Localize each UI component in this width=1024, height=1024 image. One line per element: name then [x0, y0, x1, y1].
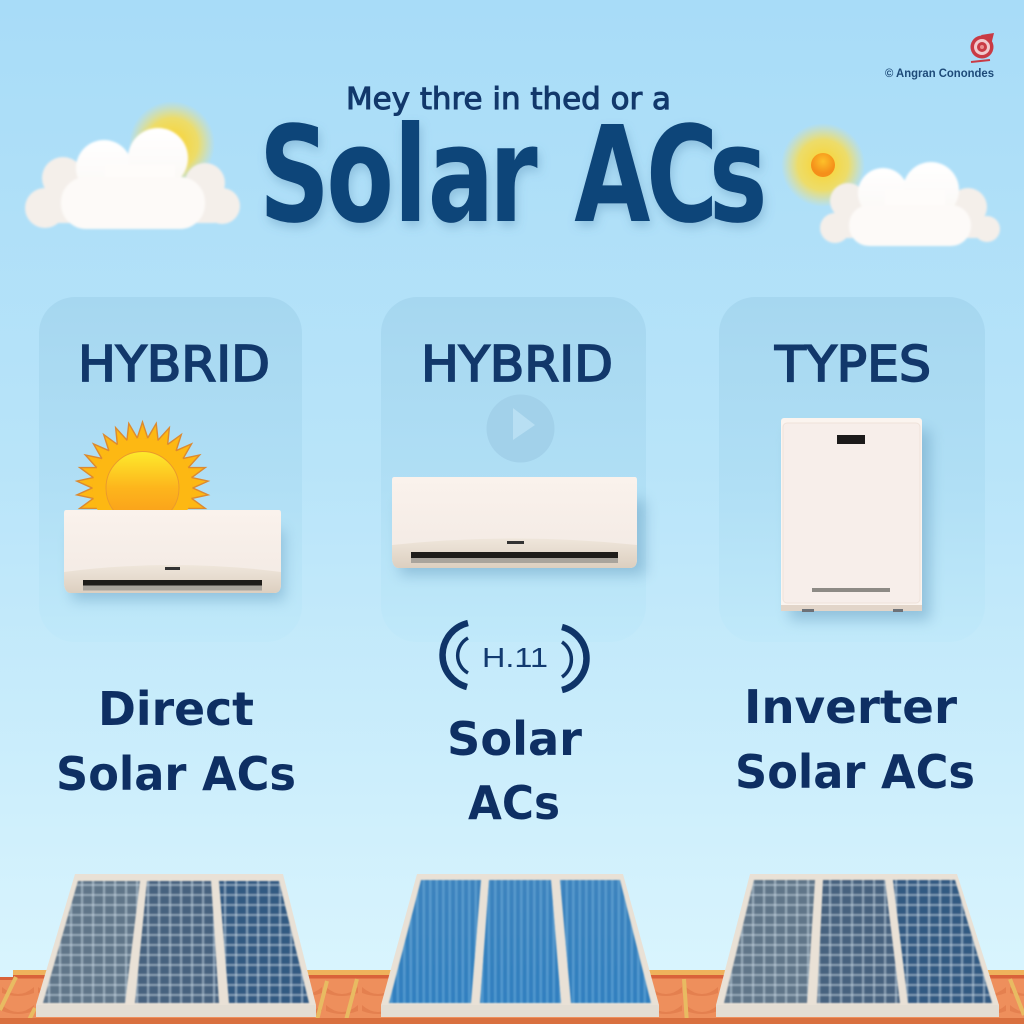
panel: hybrid middle [381, 297, 646, 642]
label: direct solar acs: Solar ACs [56, 747, 296, 801]
icon: right sun and cloud [781, 123, 1000, 246]
label: inverter solar acs: Inverter [744, 680, 957, 734]
solar panel 1 [36, 874, 316, 1017]
label: direct solar acs [56, 682, 296, 801]
icon: H.11 signal [443, 623, 587, 690]
icon: H.11 signal: H.11 [482, 642, 548, 673]
air conditioner unit 1 [64, 510, 284, 600]
heading: hybrid 2: HYBRID [421, 336, 613, 393]
label: solar acs: ACs [468, 776, 560, 830]
heading: hybrid 1: HYBRID [78, 336, 270, 393]
label: solar acs [447, 712, 582, 830]
label: direct solar acs: Direct [98, 682, 254, 736]
label: inverter solar acs [735, 680, 975, 799]
label: inverter solar acs: Solar ACs [735, 745, 975, 799]
panel: hybrid direct [39, 297, 302, 642]
inverter unit [781, 418, 930, 620]
logo mark [970, 33, 994, 62]
label: solar acs: Solar [447, 712, 582, 766]
icon: left sun and cloud [25, 101, 240, 229]
subtitle: Mey thre in thed or a [346, 82, 671, 117]
solar panel 3 [716, 874, 999, 1017]
icon: play button [486, 394, 554, 462]
air conditioner unit 2 [392, 477, 645, 575]
solar panel 2 [381, 874, 659, 1017]
icon: spiky sun [74, 420, 210, 510]
panel: types [719, 297, 985, 642]
title: Solar ACs [259, 97, 768, 253]
roof tiles [0, 970, 1024, 1024]
heading: types: TYPES [774, 336, 931, 393]
copyright text: © Angran Conondes [885, 68, 994, 80]
